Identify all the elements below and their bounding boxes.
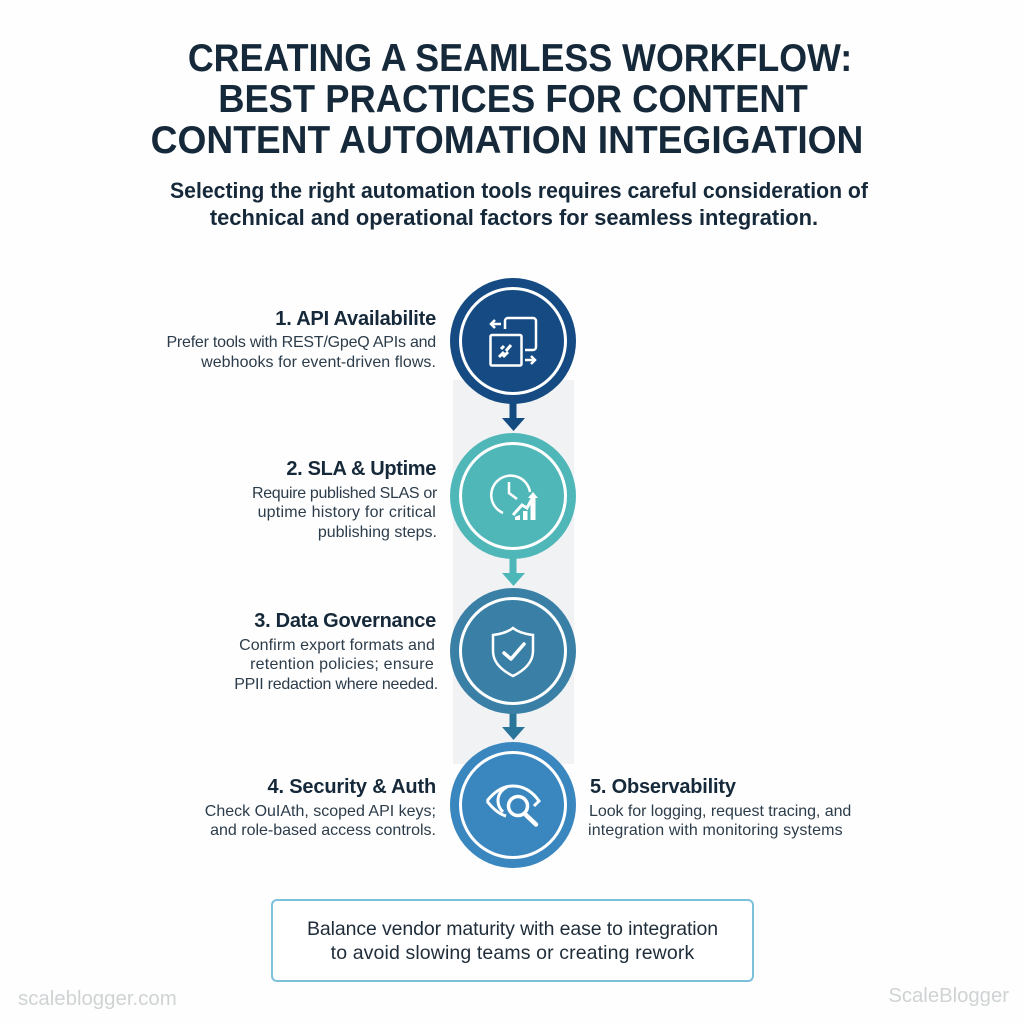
step 1 text: Prefer tools with REST/GpeQ APIs and	[166, 334, 436, 351]
step 3 node	[450, 588, 576, 740]
callout box	[271, 899, 754, 982]
step 3 text: Confirm export formats and	[239, 637, 435, 654]
step 3 text: PPII redaction where needed.	[234, 676, 438, 693]
callout box: to avoid slowing teams or creating rework	[331, 942, 694, 964]
step 2 text: 2. SLA & Uptime	[286, 458, 436, 480]
step 1 text: webhooks for event-driven flows.	[201, 354, 436, 371]
step 4 text	[205, 776, 436, 839]
step 3 text: 3. Data Governance	[254, 610, 436, 632]
callout box: Balance vendor maturity with ease to integration	[307, 918, 718, 940]
step 2 text: Require published SLAS or	[252, 484, 437, 502]
subtitle	[170, 178, 868, 230]
step 4 text: 4. Security & Auth	[268, 776, 436, 798]
step 4 text: and role-based access controls.	[210, 822, 436, 839]
icon: eye with magnifier	[487, 786, 539, 824]
title: CREATING A SEAMLESS WORKFLOW:	[188, 37, 852, 80]
step 5 text: Look for logging, request tracing, and	[589, 803, 851, 820]
watermark right: ScaleBlogger	[888, 985, 1009, 1007]
step 2 text: publishing steps.	[318, 524, 437, 540]
step 2 node	[450, 433, 576, 586]
step 2 text	[252, 458, 438, 540]
step 5 text	[588, 776, 851, 839]
step 5 text: integration with monitoring systems	[588, 822, 843, 839]
title	[150, 37, 863, 162]
icon: clock and growth chart	[491, 476, 538, 520]
step 3 text: retention policies; ensure	[250, 656, 434, 673]
title: CONTENT AUTOMATION INTEGIGATION	[150, 119, 863, 162]
watermark left: scaleblogger.com	[18, 988, 177, 1010]
subtitle: technical and operational factors for seamless integration.	[210, 205, 818, 230]
step 5 text: 5. Observability	[590, 776, 736, 798]
step 4 node	[450, 742, 576, 868]
icon: API exchange	[490, 318, 536, 366]
title: BEST PRACTICES FOR CONTENT	[218, 78, 807, 121]
step 1 node	[450, 278, 576, 431]
step 1 text	[166, 308, 436, 371]
step 1 text: 1. API Availabilite	[275, 308, 436, 330]
step 2 text: uptime history for critical	[258, 504, 436, 521]
icon: shield check	[493, 628, 533, 676]
step 3 text	[234, 610, 438, 693]
step 4 text: Check OuIAth, scoped API keys;	[205, 803, 436, 820]
subtitle: Selecting the right automation tools requires careful consideration of	[170, 178, 868, 203]
